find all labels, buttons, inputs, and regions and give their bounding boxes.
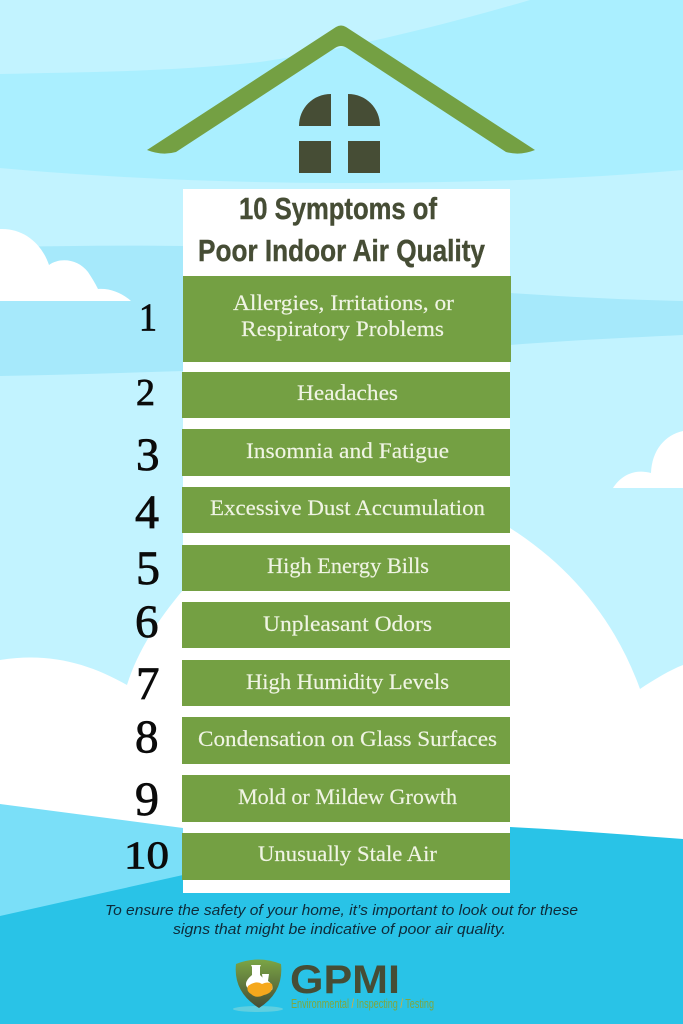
title — [198, 191, 486, 268]
symptom 8: 8 — [135, 711, 158, 763]
icon: house roof — [147, 26, 535, 154]
symptom 4: 4 — [135, 486, 159, 539]
water band dark — [0, 827, 683, 1024]
symptom 7: High Humidity Levels — [246, 669, 449, 694]
water band light — [0, 804, 183, 925]
cloud: upper left — [0, 229, 131, 301]
symptom 8: Condensation on Glass Surfaces — [198, 726, 497, 751]
symptom 9 — [135, 773, 510, 826]
symptom 10 — [124, 833, 510, 880]
symptom 2: 2 — [136, 372, 155, 414]
caption: signs that might be indicative of poor air quality. — [173, 922, 506, 938]
symptom 10: 10 — [124, 834, 169, 877]
caption — [105, 903, 578, 938]
title: 10 Symptoms of — [239, 191, 438, 226]
symptom 5: High Energy Bills — [267, 553, 429, 578]
symptom 6 — [135, 596, 510, 648]
symptom 7 — [136, 658, 510, 710]
symptom 1: 1 — [139, 296, 157, 339]
symptom 9: 9 — [135, 773, 159, 826]
icon: shield with flasks — [233, 960, 283, 1012]
symptom 3 — [136, 429, 510, 481]
symptom 6: 6 — [135, 596, 158, 648]
symptom 1 — [139, 276, 511, 362]
logo wordmark: GPMI — [290, 958, 400, 1002]
symptom 10: Unusually Stale Air — [258, 841, 438, 866]
logo: GPMI — [233, 958, 434, 1012]
title: Poor Indoor Air Quality — [198, 233, 486, 268]
symptom 1: Respiratory Problems — [241, 316, 444, 341]
symptom 3: 3 — [136, 429, 160, 481]
icon: window — [299, 94, 380, 173]
symptom 7: 7 — [136, 658, 160, 710]
cloud: right — [613, 431, 683, 488]
symptom 2 — [136, 372, 510, 418]
symptom 3: Insomnia and Fatigue — [246, 438, 449, 463]
caption: To ensure the safety of your home, it’s important to look out for these — [105, 903, 578, 919]
symptom 2: Headaches — [297, 380, 398, 405]
logo tagline: Environmental / Inspecting / Testing — [291, 996, 434, 1011]
symptom 4 — [135, 486, 510, 539]
symptom 8 — [135, 711, 510, 764]
symptom 5: 5 — [136, 542, 160, 595]
symptom 9: Mold or Mildew Growth — [238, 784, 457, 809]
symptom 6: Unpleasant Odors — [263, 611, 432, 636]
symptom 5 — [136, 542, 510, 595]
white panel — [183, 189, 510, 893]
symptom 1: Allergies, Irritations, or — [233, 290, 455, 315]
symptom 4: Excessive Dust Accumulation — [210, 495, 485, 520]
large white cloud — [0, 520, 683, 860]
